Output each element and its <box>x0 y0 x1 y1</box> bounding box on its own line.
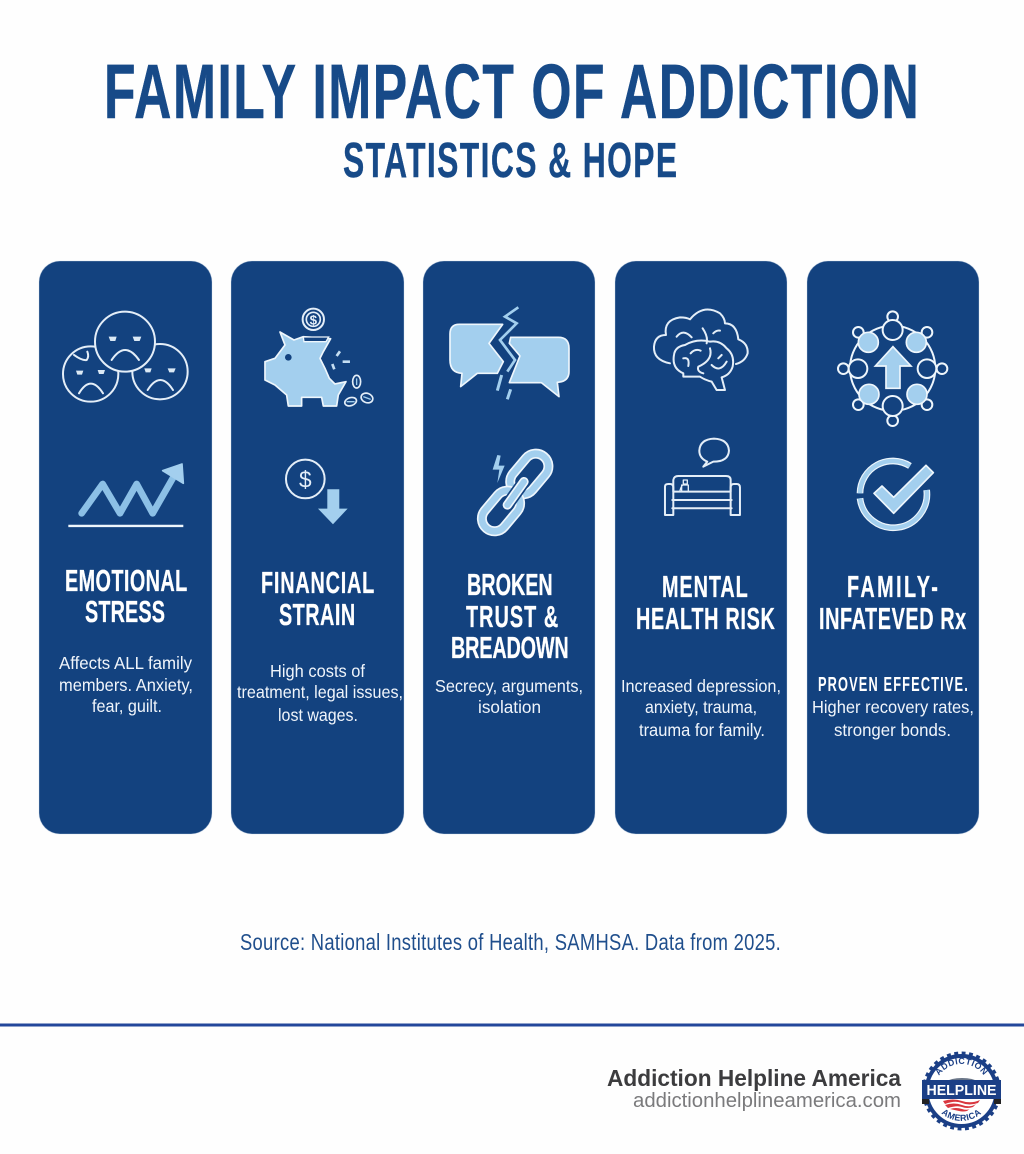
heading: HEALTH RISK <box>636 600 775 636</box>
icon: broken chain link <box>477 448 554 536</box>
description: High costs of <box>270 661 365 681</box>
description: members. Anxiety, <box>59 675 193 695</box>
heading: INFATEVED Rx <box>819 600 967 636</box>
description: fear, guilt. <box>92 696 162 716</box>
description: stronger bonds. <box>834 720 951 740</box>
description <box>59 653 193 716</box>
logo badge: HELPLINE <box>926 1082 996 1099</box>
description: anxiety, trauma, <box>645 697 757 717</box>
description: Affects ALL family <box>59 653 192 673</box>
icon: check mark in ring <box>860 461 933 528</box>
description: trauma for family. <box>639 720 765 740</box>
subtitle: STATISTICS & HOPE <box>343 133 677 188</box>
heading: EMOTIONAL <box>65 562 187 598</box>
description: lost wages. <box>278 705 358 725</box>
heading: FAMILY- <box>847 568 938 604</box>
description: treatment, legal issues, <box>237 682 403 702</box>
heading: STRESS <box>85 593 165 629</box>
heading <box>65 562 187 629</box>
heading: MENTAL <box>662 568 748 604</box>
icon: brain in cloud <box>654 309 748 390</box>
panel: broken trust and breakdown <box>423 261 595 834</box>
icon: therapy couch with speech bubble <box>665 439 740 515</box>
title: FAMILY IMPACT OF ADDICTION <box>104 49 919 134</box>
description: Higher recovery rates, <box>812 697 974 717</box>
icon: connected circle network with up arrow <box>838 311 947 426</box>
description <box>435 676 583 717</box>
heading <box>819 568 967 636</box>
logo badge <box>922 1052 1001 1130</box>
icon: rising stress chart <box>68 464 183 526</box>
icon: dollar with down arrow: $ <box>299 466 312 492</box>
heading: FINANCIAL <box>261 564 374 600</box>
icon: dollar with down arrow <box>286 460 348 524</box>
description: isolation <box>478 697 541 717</box>
heading: BREADOWN <box>451 629 569 665</box>
icon: split speech bubbles <box>450 307 569 399</box>
icon: broken piggy bank: $ <box>310 312 318 327</box>
logo badge: AMERICA <box>941 1110 982 1121</box>
logo badge: ADDICTION <box>936 1058 988 1076</box>
heading <box>636 568 775 636</box>
description <box>237 661 403 725</box>
source note: Source: National Institutes of Health, SAMHSA. Data from 2025. <box>240 930 781 956</box>
icon: broken piggy bank <box>265 309 374 407</box>
heading: STRAIN <box>279 596 355 632</box>
description: Increased depression, <box>621 676 781 696</box>
heading: TRUST & <box>466 598 558 634</box>
icon: three sad faces <box>63 312 188 402</box>
heading: BROKEN <box>467 566 553 602</box>
description: Secrecy, arguments, <box>435 676 583 696</box>
panel: family-informed treatment <box>807 261 979 834</box>
panel: financial strain <box>231 261 404 834</box>
description: PROVEN EFFECTIVE. <box>818 673 968 696</box>
description <box>621 676 781 740</box>
footer website: addictionhelplineamerica.com <box>633 1090 901 1112</box>
panel: mental health risk <box>615 261 787 834</box>
heading <box>451 566 569 665</box>
heading <box>261 564 374 632</box>
description <box>812 673 974 740</box>
footer organisation name: Addiction Helpline America <box>607 1065 902 1091</box>
panel: emotional stress <box>39 261 212 834</box>
